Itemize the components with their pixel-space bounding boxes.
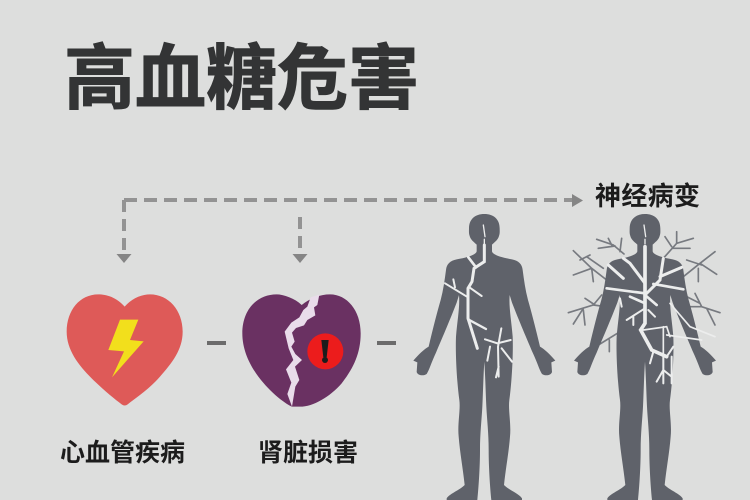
figure: body with spreading nerve damage — [568, 214, 720, 500]
nerve cracks — [445, 225, 512, 377]
upper left branches — [597, 238, 624, 254]
shoulder branch — [468, 257, 476, 267]
red heart — [67, 294, 183, 405]
arrow: top line to neuropathy — [124, 198, 574, 202]
face mark — [483, 225, 485, 244]
arrow: down to kidney damage — [298, 217, 302, 252]
connector dash: kidney to body — [377, 341, 396, 345]
white nerve network — [607, 225, 715, 383]
groin branches — [650, 347, 673, 383]
warning circle — [307, 333, 343, 369]
hip branch — [485, 328, 512, 377]
body silhouette — [574, 214, 716, 500]
arrowhead: middle — [292, 254, 308, 263]
crack — [285, 295, 319, 407]
connector dash: heart to kidney — [207, 341, 226, 345]
purple heart — [242, 294, 361, 407]
lower left branches — [568, 295, 607, 325]
exclamation mark — [321, 340, 329, 357]
arm branch — [445, 279, 482, 297]
body silhouette — [413, 214, 555, 500]
icon: red heart with lightning — [67, 294, 183, 405]
right hip branches — [643, 303, 715, 353]
icon: cracked purple heart with warning — [242, 294, 361, 407]
label: cardiovascular disease: 心血管疾病 — [60, 439, 185, 467]
label: kidney damage: 肾脏损害 — [258, 439, 358, 467]
far left branches — [573, 251, 607, 282]
central trunk — [641, 247, 667, 357]
face mark — [644, 225, 646, 244]
chest branches — [607, 284, 683, 305]
arrow: down to cardiovascular disease — [122, 200, 126, 252]
arrowhead: left — [116, 254, 132, 263]
arrowhead: right — [572, 194, 583, 207]
label: neuropathy: 神经病变 — [595, 181, 700, 211]
lower hand branch — [600, 332, 620, 352]
waist branches — [620, 298, 655, 325]
waist branch — [468, 319, 486, 329]
branches outside body — [568, 232, 720, 352]
upper branches — [608, 258, 682, 295]
far right branches — [683, 252, 717, 282]
upper right branches — [663, 232, 693, 258]
title: 高血糖危害 — [64, 40, 419, 119]
exclamation dot — [322, 357, 328, 363]
main nerve — [468, 245, 484, 348]
lightning bolt — [108, 320, 144, 377]
figure: body with early nerve damage — [413, 214, 555, 500]
lower right branches — [687, 293, 720, 325]
dashed connector arrows — [116, 194, 583, 263]
